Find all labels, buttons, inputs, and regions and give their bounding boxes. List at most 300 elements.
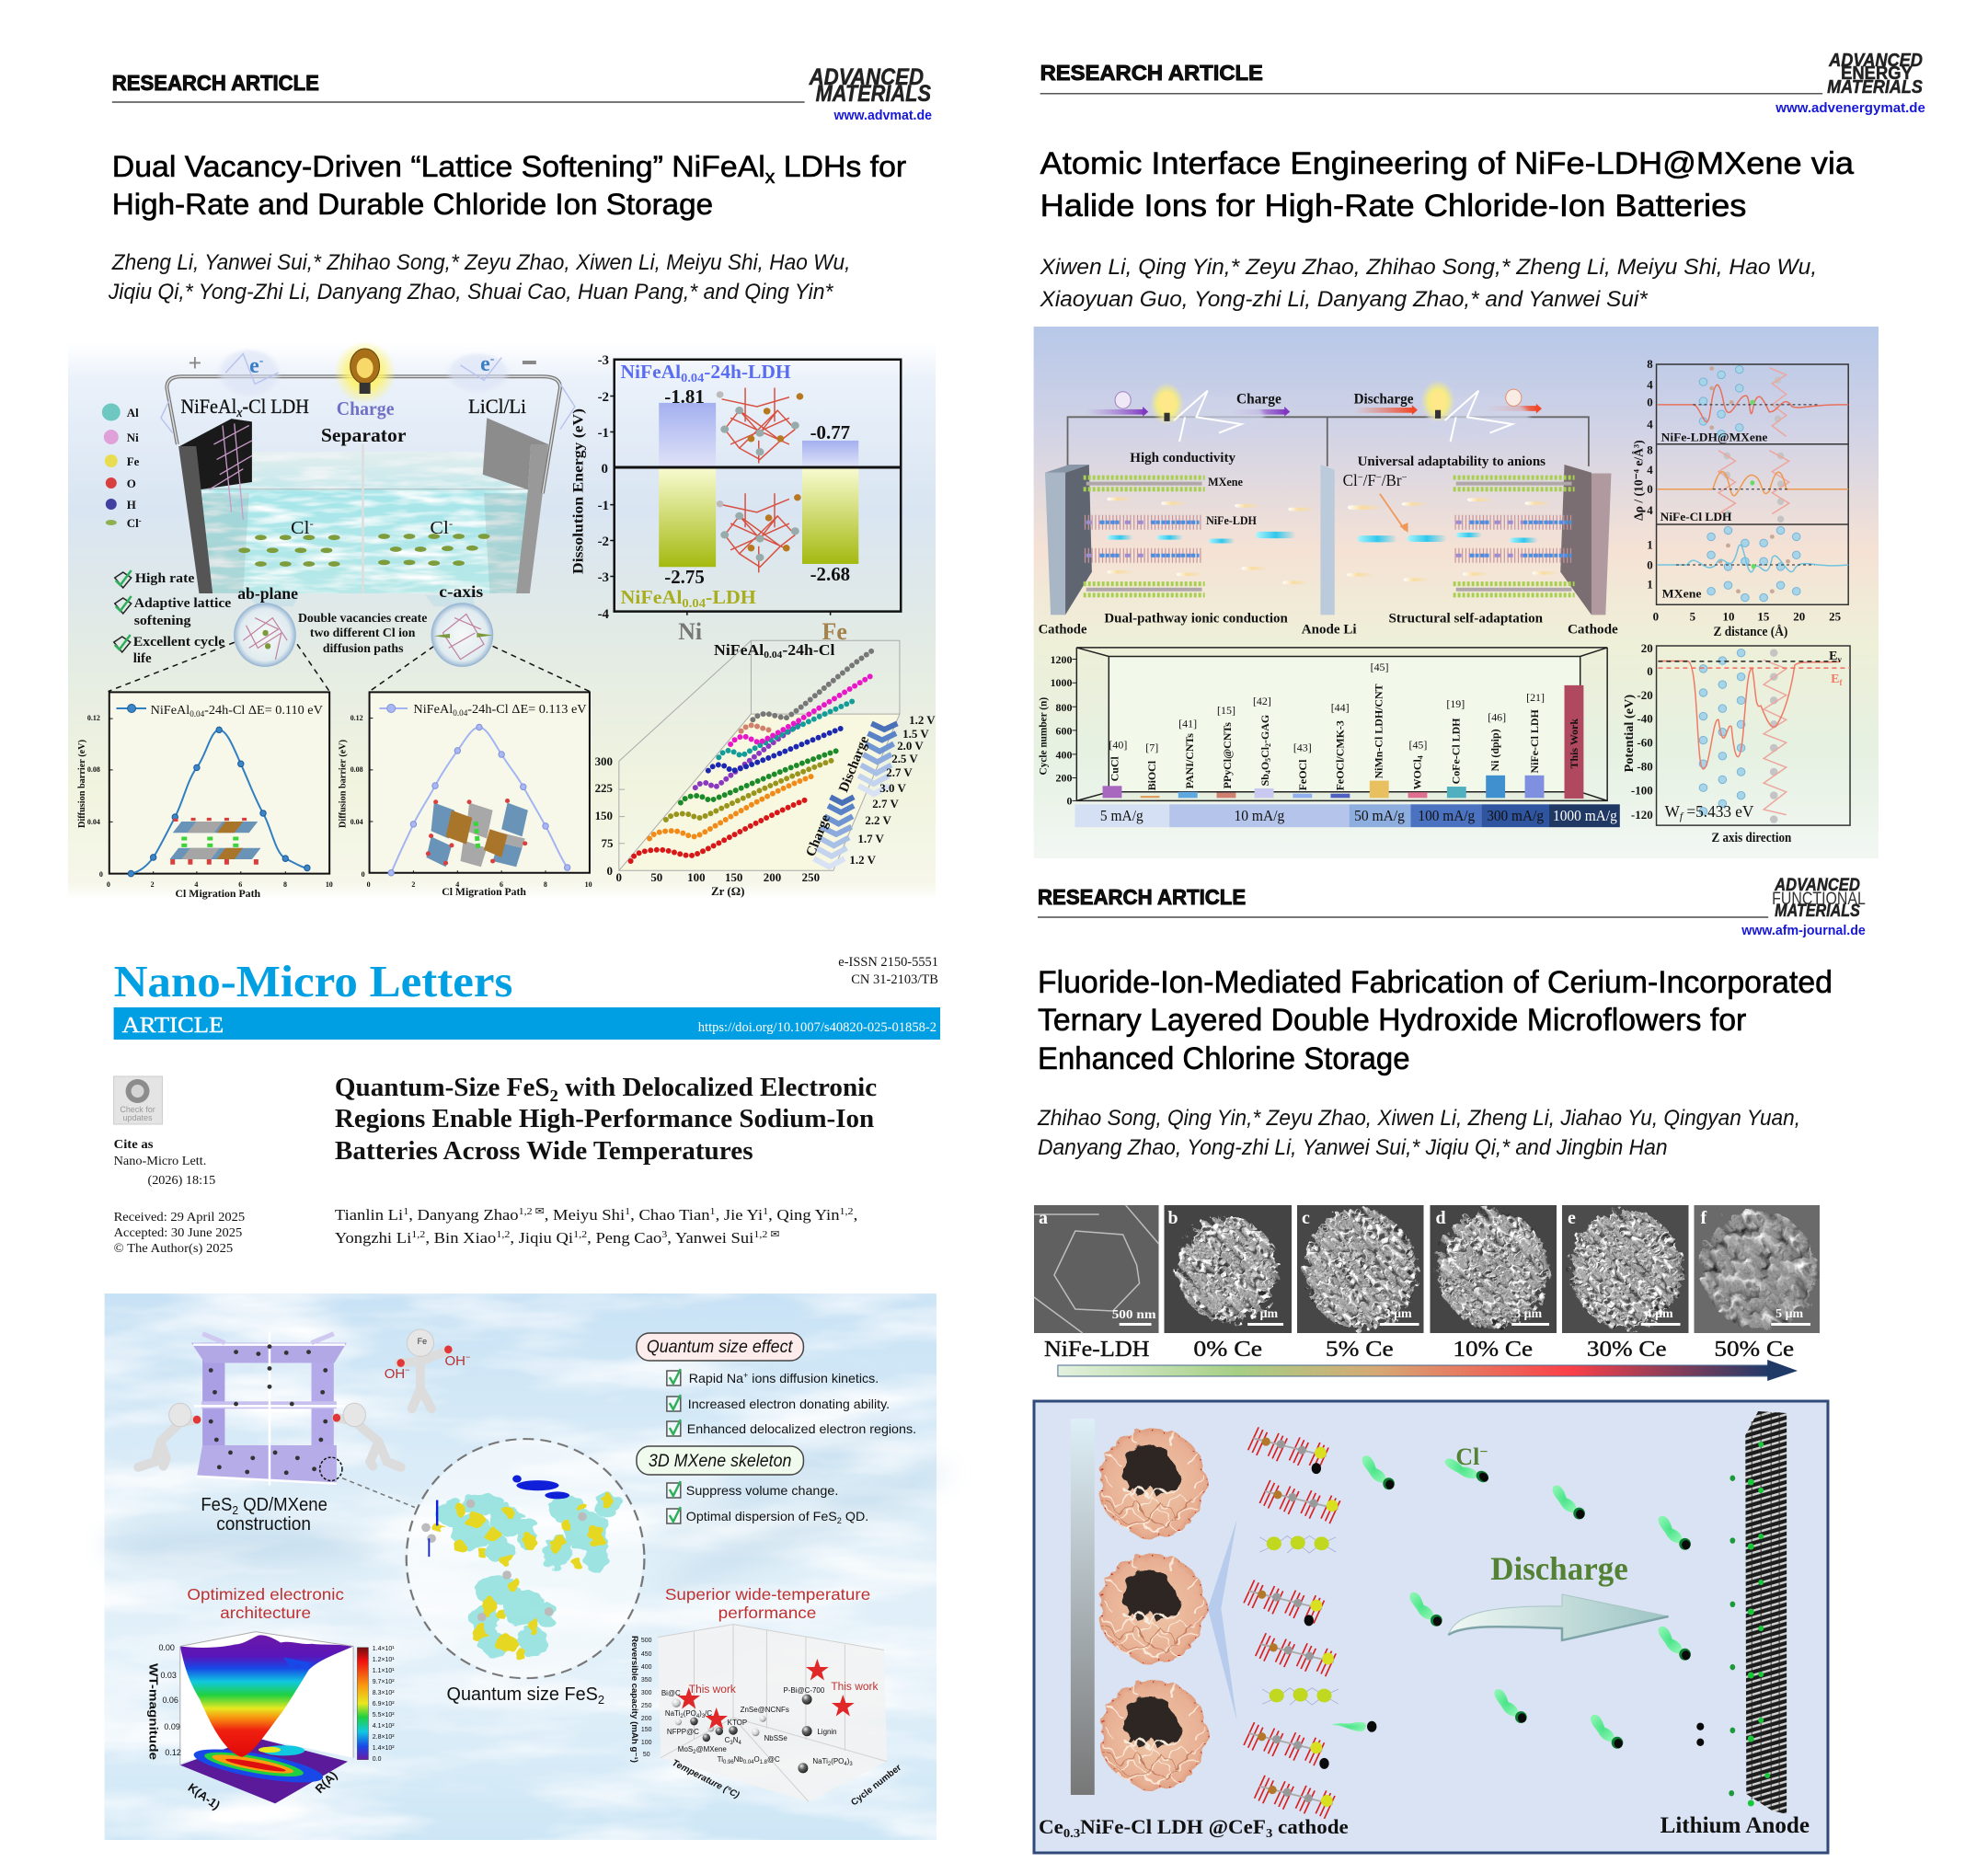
chart labels: 0.04 [453,708,468,718]
plot area [1657,646,1850,825]
article title [1038,965,1833,1076]
article title [1040,146,1854,224]
SEM tile a: NiFe-LDH: a [1039,1208,1048,1228]
chart labels: 0 [367,880,371,889]
scatter labels: /C [705,1709,712,1718]
potential labels: W [1665,802,1681,821]
scatter labels [630,1636,903,1808]
axis labels: -2 [598,390,609,405]
SEM tile d: 10% Ce: 3 μm [1514,1307,1543,1321]
polarity and electron labels: - [259,354,264,368]
hollow microflower spheres [1098,1429,1237,1789]
cell labels: -Cl LDH [242,395,309,418]
title and tick labels: 100 [687,870,706,884]
y axis labels [1037,653,1073,807]
issn: CN 31-2103/TB [851,972,938,987]
authors: , Meiyu Shi [545,1206,625,1224]
title and tick labels: 50 [650,870,662,884]
axis labels: -3 [598,570,609,585]
schematic labels: High conductivity [1130,451,1236,466]
arrow: increasing Ce content [1058,1360,1798,1381]
schematic labels: Universal adaptability to anions [1358,454,1546,469]
plot labels: 4 [1647,378,1653,392]
chart labels: 0.04 [350,818,363,826]
axis labels: 1.2×10¹ [373,1657,395,1663]
SEM tile e: 30% Ce: e [1568,1208,1576,1228]
stars: this work [677,1659,855,1730]
journal logo: MATERIALS [1775,902,1860,921]
feature checklist: Excellent cycle [133,635,225,650]
plot labels: 10 [1722,609,1734,623]
article banner: ARTICLE [122,1014,224,1038]
feature checklist: softening [134,614,191,628]
chart labels: 0 [99,870,103,879]
callout: 3D MXene skeleton: Suppress volume change. [686,1483,838,1498]
chart labels: 4 [455,880,459,889]
cell labels: x [236,406,243,420]
cell labels: Charge [337,397,395,420]
SEM tile e: 30% Ce: 4 μm [1646,1307,1673,1321]
scatter labels: 350 [641,1677,652,1684]
current density band: 50 mA/g [1354,807,1405,824]
authors [108,250,850,305]
schematic labels: MXene [1208,475,1243,489]
schematic labels: − [1376,472,1382,483]
potential labels: f [1839,678,1843,687]
cell labels: NiFeAl [180,395,241,418]
article B: Advanced Energy Materials [1034,51,1925,858]
authors: , Bin Xiao [425,1229,496,1247]
bar names: BiOCl [1145,760,1158,790]
chart labels: 10 [326,880,333,889]
SEM tile a: NiFe-LDH: 500 nm [1112,1308,1156,1322]
plot labels: 15 [1757,609,1769,623]
authors: Yongzhi Li [335,1229,405,1247]
scatter labels: This work [831,1680,878,1693]
chart labels: 0.12 [87,714,100,722]
axis labels: -2 [598,535,609,549]
chart labels: Cl Migration Path [442,885,526,898]
heading: optimized electronic architecture: Optimized electronic [187,1585,344,1604]
cell labels: LiCl/Li [468,395,526,418]
axis labels: R(A) [312,1768,339,1796]
bar names: -GAG [1258,715,1271,743]
atom legend: Cl [127,516,139,530]
potential labels: -100 [1631,783,1653,797]
title and tick labels: 225 [595,781,614,795]
scatter labels: @C [767,1755,780,1764]
SEM tile c: 5% Ce: c [1302,1208,1310,1228]
axis labels: 4.1×10² [373,1723,395,1730]
SEM tile e: 30% Ce [1562,1205,1689,1333]
axis labels [598,353,610,622]
scatter labels: Cycle number [849,1763,903,1808]
authors: , Qing Yin [768,1206,840,1224]
title and tick labels: 0.04 [764,650,783,661]
axis labels: 0.0 [373,1756,382,1763]
scatter labels: 1.8 [760,1760,768,1765]
3D frame and bars [1072,648,1607,800]
bar names: PPyCl@CNTs [1221,722,1234,788]
plot labels: 0 [1647,396,1653,409]
authors: , Jie Yi [716,1206,763,1224]
scatter labels: Bi@C [661,1689,681,1697]
bar names: 5 [1264,758,1272,762]
check for updates badge: Check for [120,1105,155,1114]
plot labels: 0 [1647,482,1653,496]
authors: 1,2 [496,1229,510,1240]
current density band: 10 mA/g [1234,807,1285,824]
journal url: www.afm-journal.de [1741,923,1866,938]
header: research article: RESEARCH ARTICLE [1040,61,1263,85]
title and tick labels: 250 [802,870,820,884]
authors: Jiqiu Qi,* Yong-Zhi Li, Danyang Zhao, Shuai Cao, Huan Pang,* and Qing Yin* [108,280,833,305]
title and tick labels: -24h-Cl [782,641,835,659]
label: cathode: NiFe-Cl LDH @CeF [1080,1815,1266,1838]
title and tick labels: 1.2 V [849,853,877,867]
plot labels: 5 [1690,609,1695,623]
SEM tile b: 0% Ce: b [1167,1208,1178,1228]
figure labels: Fe [418,1337,427,1346]
potential labels: -40 [1637,712,1653,726]
series and value labels [620,361,850,645]
citation details [114,1138,245,1256]
schematic labels: Cathode [1568,622,1618,637]
bars and structures [610,360,901,615]
y axis labels: 0 [1067,794,1073,807]
scatter labels: KTOP [728,1719,747,1727]
potential labels: 20 [1641,641,1653,655]
title and tick labels: Zr (Ω) [711,884,744,898]
bar names: 2 [1264,743,1272,747]
surface and colour bar [180,1632,368,1803]
authors: Zheng Li, Yanwei Sui,* Zhihao Song,* Zeyu Zhao, Xiwen Li, Meiyu Shi, Hao Wu, [111,250,850,275]
journal logo: FUNCTIONAL [1772,890,1866,909]
arrow: discharge direction [1448,1594,1669,1640]
scatter labels: 2 [680,1714,684,1719]
axis labels: 5.5×10² [373,1712,395,1719]
schematic labels: NiFe-LDH [1206,513,1257,527]
y axis labels: 1200 [1051,653,1073,666]
schematic labels [1039,392,1618,637]
plot labels: 8 [1647,357,1653,371]
bar names: 4 [1416,755,1424,759]
current density band [1074,804,1620,827]
axis labels: 1.4×10² [373,1745,395,1752]
authors: 1,2 [573,1229,587,1240]
callout: quantum size effect: Quantum size effect [647,1338,793,1357]
cell labels [180,395,526,538]
potential labels: -20 [1637,688,1653,702]
plot labels: NiFe-LDH@MXene [1661,430,1768,443]
bar names: WOCl [1410,759,1423,789]
check for updates badge: updates [123,1113,153,1122]
chart labels: 0.04 [190,709,205,719]
plot labels: Δρ / (10⁻⁴ e/Å³) [1632,440,1647,521]
series and value labels: -LDH [706,586,756,608]
scatter labels: 200 [641,1716,652,1722]
authors: , Peng Cao [587,1229,661,1247]
issn: e-ISSN 2150-5551 [838,955,938,970]
chart: electrostatic potential [1623,641,1850,845]
bar names [1108,684,1580,790]
SEM tile c: 5% Ce [1297,1205,1424,1333]
scatter labels: Reversible capacity (mAh g⁻¹) [630,1636,639,1763]
plot labels: 0 [1647,558,1653,572]
callout: 3D MXene skeleton [637,1446,868,1525]
scatter labels: 150 [641,1727,652,1733]
layered LDH structures [1244,1427,1340,1819]
cell labels: Cl [291,518,308,538]
polarity and electron labels: - [490,352,495,366]
atom legend: - [139,516,142,525]
chart: 3D performance comparison [630,1625,903,1808]
plot labels: 8 [1647,443,1653,456]
bar names: FeOCl [1296,759,1309,790]
current density band: 1000 mA/g [1553,807,1617,824]
plot labels: 1 [1647,538,1653,552]
article title: Fluoride-Ion-Mediated Fabrication of Cerium-Incorporated [1038,965,1833,1000]
bar references [1109,661,1545,754]
header: research article: RESEARCH ARTICLE [112,71,319,95]
polarity and electron labels: e [249,354,259,378]
chart labels: Diffusion barrier (eV) [76,740,87,828]
title and tick labels: 2.0 V [897,739,924,753]
article banner: https://doi.org/10.1007/s40820-025-01858-2 [698,1020,937,1035]
chart: cycle number comparison [1037,648,1620,827]
article title [112,150,907,221]
diffusion path labels: two different Cl ion [310,627,416,640]
bar references: [40] [1109,739,1127,752]
title and tick labels: 1.2 V [909,713,936,727]
bar names: Ni (dpip) [1488,729,1501,771]
panel background [68,342,936,900]
chart: charge density difference [1632,357,1848,639]
label: frame construction: FeS [201,1495,235,1515]
scatter labels: 3 [702,1714,706,1719]
bar names: 4 [1264,770,1272,774]
heading: optimized electronic architecture [187,1585,344,1622]
chart labels: -24h-Cl ΔE= 0.110 eV [204,704,323,718]
title and tick labels: 1.5 V [902,727,929,741]
label: frame construction: QD/MXene [238,1495,328,1515]
label: frame construction [201,1495,328,1535]
axis labels: -1 [598,426,609,441]
title and tick labels: Charge [803,812,833,859]
chart labels: Cl Migration Path [176,887,260,900]
SEM tile f: 50% Ce: 5 μm [1775,1307,1804,1321]
SEM tile d: 10% Ce [1430,1205,1557,1333]
background water streams [100,1415,956,1598]
title and tick labels: NiFeAl [714,641,762,659]
series and value labels: 0.04 [682,597,706,611]
current density band: 5 mA/g [1100,807,1143,824]
chart labels: 2 [151,880,155,889]
battery schematic [1045,380,1611,615]
figure labels: − [405,1365,409,1374]
composition labels: NiFe-LDH [1044,1338,1150,1362]
SEM tile d: 10% Ce: d [1435,1208,1446,1228]
title and tick labels: 0 [615,870,622,884]
figure labels: OH [385,1366,405,1382]
authors: Xiaoyuan Guo, Yong-zhi Li, Danyang Zhao,* and Yanwei Sui* [1040,287,1648,312]
chart labels: NiFeAl [151,704,189,718]
bar names: CuCl [1108,756,1120,781]
authors: 1 [403,1206,408,1217]
callout: quantum size effect: Increased electron donating ability. [688,1397,890,1411]
heading: superior wide-temperature performance: Superior wide-temperature [665,1585,870,1604]
composition labels: 0% Ce [1193,1338,1262,1362]
title and tick labels: 0 [607,864,613,878]
scatter labels: 3 [849,1762,853,1767]
chart: diffusion barrier ab-plane [76,692,333,900]
series and value labels: -1.81 [664,385,705,408]
diffusion path labels: Double vacancies create [298,612,427,626]
journal name: Nano-Micro Letters [114,956,512,1006]
three stacked plots [1657,364,1848,604]
header: research article: RESEARCH ARTICLE [1038,885,1246,909]
crystal bubbles and zoom lines [109,603,590,692]
chart labels: 0.04 [87,818,100,826]
scatter labels: NaTi [665,1709,680,1718]
chart labels: 0.08 [350,765,363,774]
figure labels [385,1337,470,1382]
axis labels: 0.03 [160,1671,177,1680]
article title: x [765,167,775,188]
article C: Nano-Micro Letters [100,955,956,1840]
schematic labels: Cathode [1039,622,1087,637]
authors: , Chao Tian [630,1206,710,1224]
plot labels: 20 [1793,609,1805,623]
feature checklist: life [133,651,152,666]
cell labels: Cl [430,518,447,538]
series and value labels: NiFeAl [620,361,679,383]
plot labels: NiFe-Cl LDH [1660,510,1731,523]
callout: quantum size effect: Enhanced delocalized electron regions. [687,1421,916,1436]
chart labels: 6 [500,880,503,889]
potential labels: Potential (eV) [1623,695,1637,772]
schematic labels: Charge [1236,392,1281,408]
scatter labels: Lignin [817,1728,837,1736]
feature checklist [114,570,232,666]
authors: 1 [625,1206,630,1217]
axis labels: 0.09 [164,1722,180,1731]
gradient bar [1071,1419,1095,1795]
journal url: www.advmat.de [833,108,932,123]
scatter labels: P-Bi@C-700 [783,1686,825,1695]
chart labels: 4 [194,880,198,889]
axis labels: K(A-1) [186,1780,223,1812]
scatter labels: Nb [734,1755,743,1764]
scatter labels: 4 [696,1714,700,1719]
axis labels: 0.06 [162,1696,178,1705]
scatter labels: 4 [844,1762,847,1767]
journal logo: ADVANCED [1828,51,1923,71]
label: cathode: cathode [1272,1815,1349,1838]
bar references: [42] [1253,695,1271,707]
article A: Advanced Materials [68,64,936,900]
label: chloride ion: Cl [1455,1443,1479,1470]
article title: Enhanced Chlorine Storage [1038,1041,1410,1076]
scatter labels: This work [689,1683,736,1696]
feature checklist: High rate [135,571,195,586]
scatter labels: 0.04 [743,1760,754,1765]
label: anode: Lithium Anode [1660,1813,1810,1838]
axis labels: 0.12 [165,1748,181,1757]
diffusion path labels [237,582,483,656]
atom legend: Fe [127,454,140,468]
series and value labels: Ni [678,618,702,645]
figure labels: OH [445,1353,465,1369]
3D axes and curves [619,640,900,870]
authors [1040,255,1817,312]
citation details: © The Author(s) 2025 [114,1242,233,1256]
cell labels: Separator [321,424,406,446]
scatter labels: 3 [730,1741,733,1746]
article D: Advanced Functional Materials [1034,876,1866,1853]
SEM tile f: 50% Ce: f [1700,1208,1706,1228]
SEM tile a: NiFe-LDH [1034,1205,1159,1333]
title and tick labels: 200 [764,870,781,884]
title and tick labels: 1.7 V [857,832,885,845]
chart labels: 10 [585,880,592,889]
journal logo: ADVANCED [809,64,924,90]
plot labels [1632,357,1841,639]
series and value labels: -24h-LDH [704,361,791,383]
SEM tile b: 0% Ce: 2 μm [1250,1307,1279,1321]
chloride ions migrating [1304,1449,1735,1796]
label: frame construction: construction [216,1514,311,1535]
chart labels: 0.08 [87,765,100,774]
label: quantum size: Quantum size FeS [447,1684,599,1705]
schematic labels: Discharge [1354,392,1413,408]
callout: 3D MXene skeleton: 3D MXene skeleton [649,1452,791,1471]
atom legend: Al [127,406,139,420]
cell labels: - [449,517,453,530]
title and tick labels: 2.5 V [891,752,918,765]
scatter labels: 0.96 [723,1760,734,1765]
chart labels: -24h-Cl ΔE= 0.113 eV [467,703,587,717]
cell labels: - [310,517,314,530]
bar names: NiMn-Cl LDH/CNT [1373,684,1385,778]
plot labels: 1 [1647,578,1653,592]
plot labels: 0 [1653,609,1659,623]
chart: 3D impedance spectra [595,640,936,898]
authors: 1,2 [840,1206,854,1217]
figure labels: − [465,1352,470,1362]
diffusion path labels: diffusion paths [323,642,404,656]
title and tick labels: 2.7 V [872,797,899,811]
scatter labels: 400 [641,1664,652,1671]
scatter labels: ) [699,1709,702,1718]
lithium anode stack [1745,1411,1787,1814]
chart labels: 0 [107,880,110,889]
schematic labels: Anode Li [1302,622,1357,637]
chart labels: 0.12 [350,714,363,722]
plot labels: Z distance (Å) [1714,625,1787,639]
authors: 1,2 [411,1229,425,1240]
bar references: [21] [1526,691,1545,704]
scatter labels: ) [847,1757,850,1765]
title and tick labels: 2.7 V [886,765,913,779]
chart: dissolution energy [571,353,901,645]
article title: Atomic Interface Engineering of NiFe-LDH@MXene via [1040,146,1854,181]
scatter labels: (PO [684,1709,696,1718]
article title: Ternary Layered Double Hydroxide Microflowers for [1038,1003,1746,1038]
label: frame construction: 2 [232,1503,238,1517]
axis labels: 1.1×10¹ [373,1668,395,1674]
axis labels: 2.8×10² [373,1734,395,1741]
